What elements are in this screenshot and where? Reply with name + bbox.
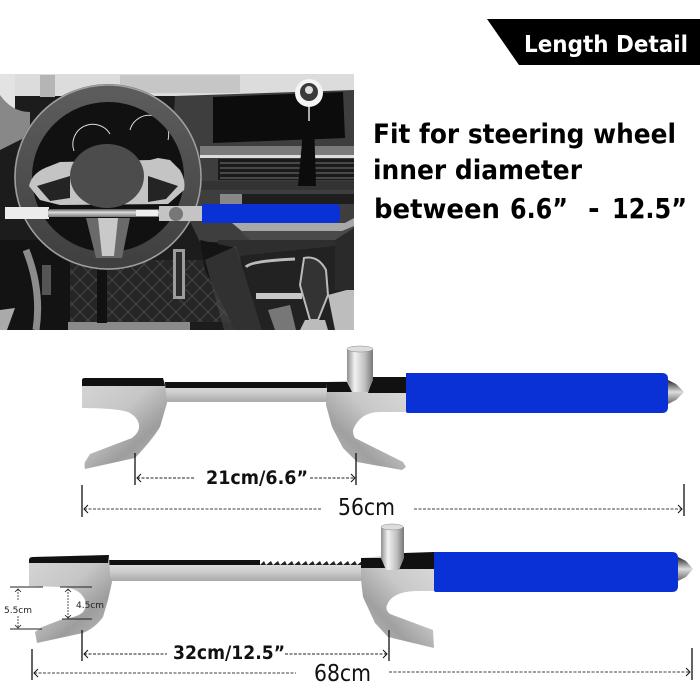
header banner: Length Detail [487,19,700,65]
dashboard [170,90,354,242]
installed lock shaft [5,206,202,221]
dimension: 21cm/6.6 inch closed inner span [135,453,356,489]
vent panel [200,146,354,260]
steering wheel instruments [32,102,184,250]
dimension: 5.5cm jaw opening: 5.5cm [4,606,32,616]
extended lock right jaw [361,552,434,648]
header banner: Length Detail: Length Detail [524,32,688,58]
fit description text: - [588,192,600,225]
fit description text [373,119,687,225]
dimension: 56cm closed total length: 56cm [338,495,395,521]
steering wheel hub and spokes [29,144,184,258]
fit description text: inner diameter [373,155,583,186]
dimension: 68cm extended total length [32,648,692,687]
fit description text: Fit for steering wheel [373,119,676,150]
closed lock shaft [165,382,328,402]
dimension: 32cm/12.5 inch extended inner span [82,630,389,664]
steering wheel rim [15,85,201,269]
closed lock right jaw [326,377,406,470]
dimension: 32cm/12.5 inch extended inner span: 32cm/12.5” [173,642,285,664]
extended lock shaft with ratchet teeth [109,560,362,581]
dimension: 4.5cm jaw throat [60,587,104,619]
center screen [213,92,345,143]
closed lock blue grip [406,373,668,413]
dimension: 5.5cm jaw opening [4,587,43,629]
extended lock left jaw [29,555,112,643]
extended lock safety hammer tip [678,557,693,581]
ornament tassel [295,79,323,186]
extended lock blue grip [434,552,678,592]
dimension: 4.5cm jaw throat: 4.5cm [76,601,104,611]
photo: steering wheel lock fitted in car interior [0,74,354,330]
closed lock safety hammer tip [668,380,684,404]
lock, closed position [82,346,684,470]
dimension: 68cm extended total length: 68cm [314,661,371,687]
dimension: 56cm closed total length [82,484,684,521]
closed lock locking pillar [347,346,373,392]
dimension: 21cm/6.6 inch closed inner span: 21cm/6.6” [206,467,308,489]
fit description text: 6.6” [510,192,568,225]
extended lock locking pillar [381,524,404,570]
fit description text: 12.5” [612,192,687,225]
installed lock blue grip [202,204,340,223]
fit description text: between [374,194,500,225]
windshield background [0,74,354,150]
closed lock left jaw [82,378,167,469]
center console with gear shifter [240,228,354,330]
lower cabin and floor mats [0,240,262,330]
lock, extended position [29,524,693,648]
